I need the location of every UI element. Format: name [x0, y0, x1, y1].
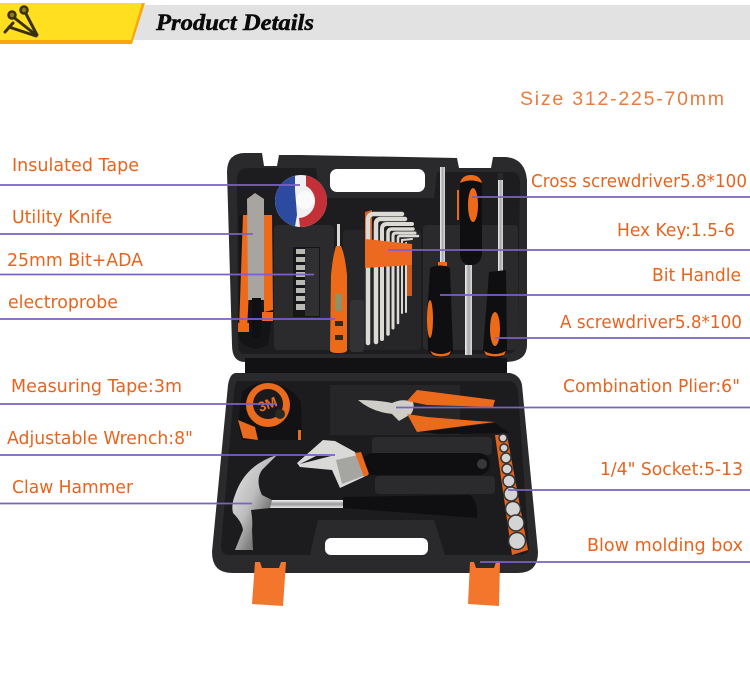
header banner: [0, 3, 750, 44]
right labels: Bit Handle: [652, 266, 741, 286]
left labels: Utility Knife: [12, 208, 112, 228]
left labels: Insulated Tape: [12, 156, 139, 176]
icon: socket rail: [495, 434, 528, 555]
size text: Size 312-225-70mm: [520, 88, 724, 110]
handle cutout: [325, 538, 428, 555]
left labels: Claw Hammer: [12, 478, 134, 498]
handle cutout: [330, 169, 425, 192]
icon: bit handle screwdriver: [427, 167, 453, 357]
title: Product Details: [155, 10, 314, 35]
hinge strip: [245, 358, 507, 374]
icon: electroprobe: [330, 224, 347, 353]
icon: hex keys: [365, 210, 418, 343]
callout lines: [0, 185, 750, 562]
icon: measuring tape: [238, 383, 302, 440]
icon: right latch: [468, 562, 500, 606]
left labels: electroprobe: [8, 293, 118, 313]
right labels: Blow molding box: [587, 536, 743, 556]
icon: left latch: [252, 562, 286, 606]
right labels: [531, 172, 747, 556]
icon: flat screwdriver: [483, 173, 507, 358]
right labels: A screwdriver5.8*100: [560, 313, 742, 333]
icon: measuring tape: 3M: [256, 393, 279, 415]
icon: tools: [5, 6, 37, 36]
icon: pliers: [358, 390, 510, 434]
right labels: Combination Plier:6": [563, 377, 740, 397]
upper case tray: [227, 153, 527, 362]
left labels: [7, 156, 193, 498]
icon: utility knife: [238, 193, 273, 349]
icon: bit holder: [293, 247, 320, 317]
right labels: Hex Key:1.5-6: [617, 221, 735, 241]
icon: claw hammer: [232, 455, 477, 550]
icon: adjustable wrench: [297, 440, 490, 488]
icon: cross screwdriver: [458, 175, 482, 355]
right labels: Cross screwdriver5.8*100: [531, 172, 747, 192]
right labels: 1/4" Socket:5-13: [600, 460, 743, 480]
left labels: 25mm Bit+ADA: [7, 251, 143, 271]
left labels: Adjustable Wrench:8": [7, 429, 193, 449]
left labels: Measuring Tape:3m: [11, 377, 182, 397]
icon: insulated tape roll: [275, 175, 327, 227]
lower case tray: [212, 373, 538, 573]
